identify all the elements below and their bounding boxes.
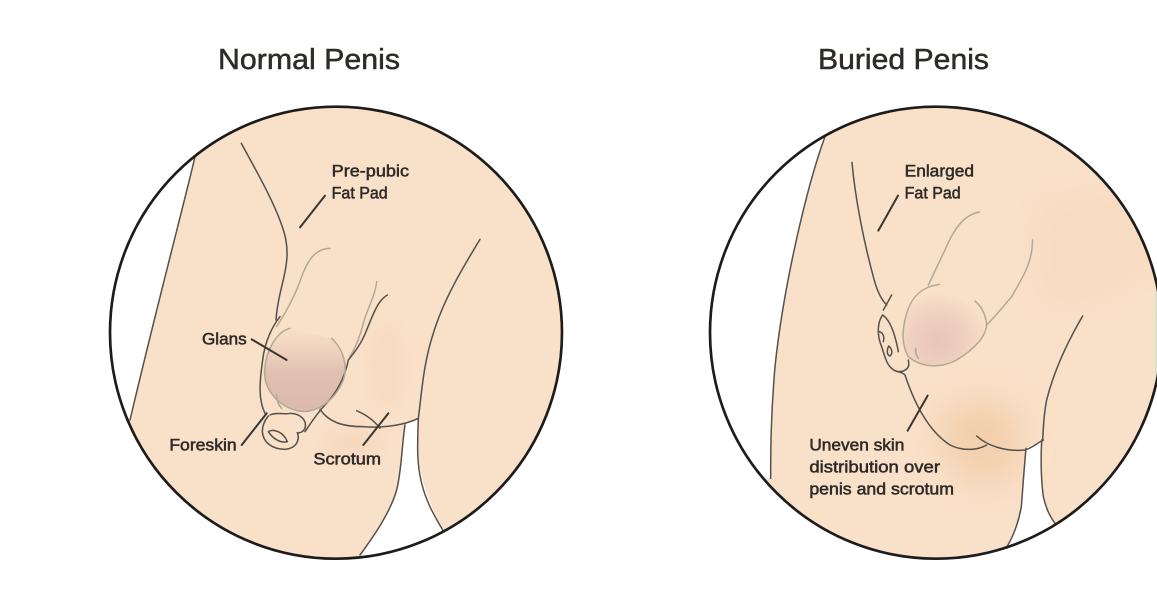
leader: foreskin xyxy=(242,413,267,445)
leader: glans xyxy=(252,339,287,360)
glans xyxy=(903,284,987,366)
label: Scrotum: Scrotum xyxy=(313,450,381,469)
label: Pre-pubic Fat Pad: Fat Pad xyxy=(332,184,388,203)
leader: enlarged fat pad xyxy=(878,196,898,231)
outlines xyxy=(852,162,1083,450)
leader: scrotum xyxy=(363,413,388,445)
panel: normal penis diagram xyxy=(100,100,573,573)
circle outline xyxy=(110,107,562,559)
panel: buried penis diagram xyxy=(700,100,1157,573)
title: Normal Penis: Normal Penis xyxy=(218,44,400,76)
label: Glans: Glans xyxy=(202,329,247,348)
label: Enlarged Fat Pad: Fat Pad xyxy=(905,184,961,203)
label: Foreskin: Foreskin xyxy=(169,436,237,455)
title: Buried Penis: Buried Penis xyxy=(818,44,989,76)
label: Uneven skin distribution over penis and scrotum: distribution over xyxy=(809,458,941,477)
leader: pre-pubic fat pad xyxy=(300,196,325,227)
circle outline xyxy=(710,107,1157,559)
label: Uneven skin distribution over penis and scrotum: penis and scrotum xyxy=(809,480,954,499)
label: Enlarged Fat Pad: Enlarged xyxy=(905,162,974,181)
label: Uneven skin distribution over penis and scrotum: Uneven skin xyxy=(809,436,904,455)
outlines xyxy=(241,143,480,449)
glans xyxy=(265,328,345,411)
label: Pre-pubic Fat Pad: Pre-pubic xyxy=(332,162,409,181)
leader: uneven skin distribution xyxy=(908,396,928,431)
